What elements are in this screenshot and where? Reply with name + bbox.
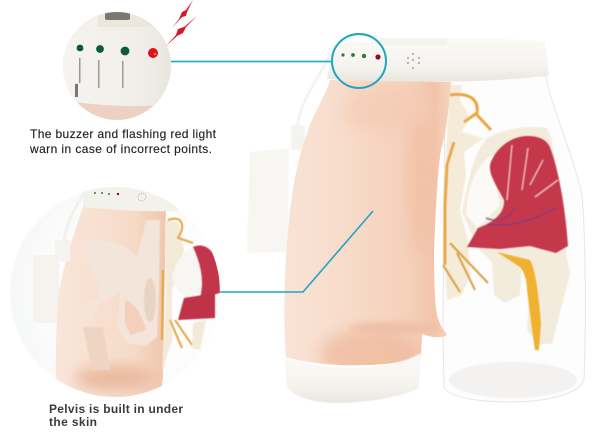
detail circle: control panel [60,10,175,120]
connector line: control panel [171,60,333,62]
printed labels [75,58,124,97]
green lights [77,45,129,55]
caption: pelvis: the skin [49,415,97,429]
speaker holes [407,53,420,69]
caption: pelvis: Pelvis is built in under [49,402,183,416]
main product: pelvis model [247,35,585,403]
skin shading [316,328,419,366]
small speaker [138,193,146,201]
tube connector [55,240,70,261]
spine and nerves [444,85,491,300]
exposed bone [172,248,202,297]
white top band [83,185,179,211]
visible pelvis bone [78,220,160,370]
glass jar [443,76,585,402]
exposed muscle [178,246,220,320]
caption: buzzer warning: warn in case of incorrect points. [29,142,212,156]
drainage bag [247,148,289,253]
connector line: pelvis [217,211,373,292]
callout circle on control panel [332,34,386,88]
icon: red lightning bolts [166,0,197,46]
bottom ring [285,353,421,403]
small lights [94,192,119,195]
skin body [284,80,451,366]
skin [56,207,166,400]
top band [327,39,549,82]
detail circle: pelvis under the skin [10,185,220,400]
power switch [98,15,158,27]
tube and connector [291,35,378,150]
sciatic nerve [443,243,541,350]
exposed spine [162,219,206,372]
red warning light [148,48,158,58]
caption: buzzer warning: The buzzer and flashing red light [30,127,217,141]
lights on band [341,53,381,60]
pelvis bone [462,127,570,344]
control box top [380,38,447,45]
gluteal muscle [467,136,568,253]
